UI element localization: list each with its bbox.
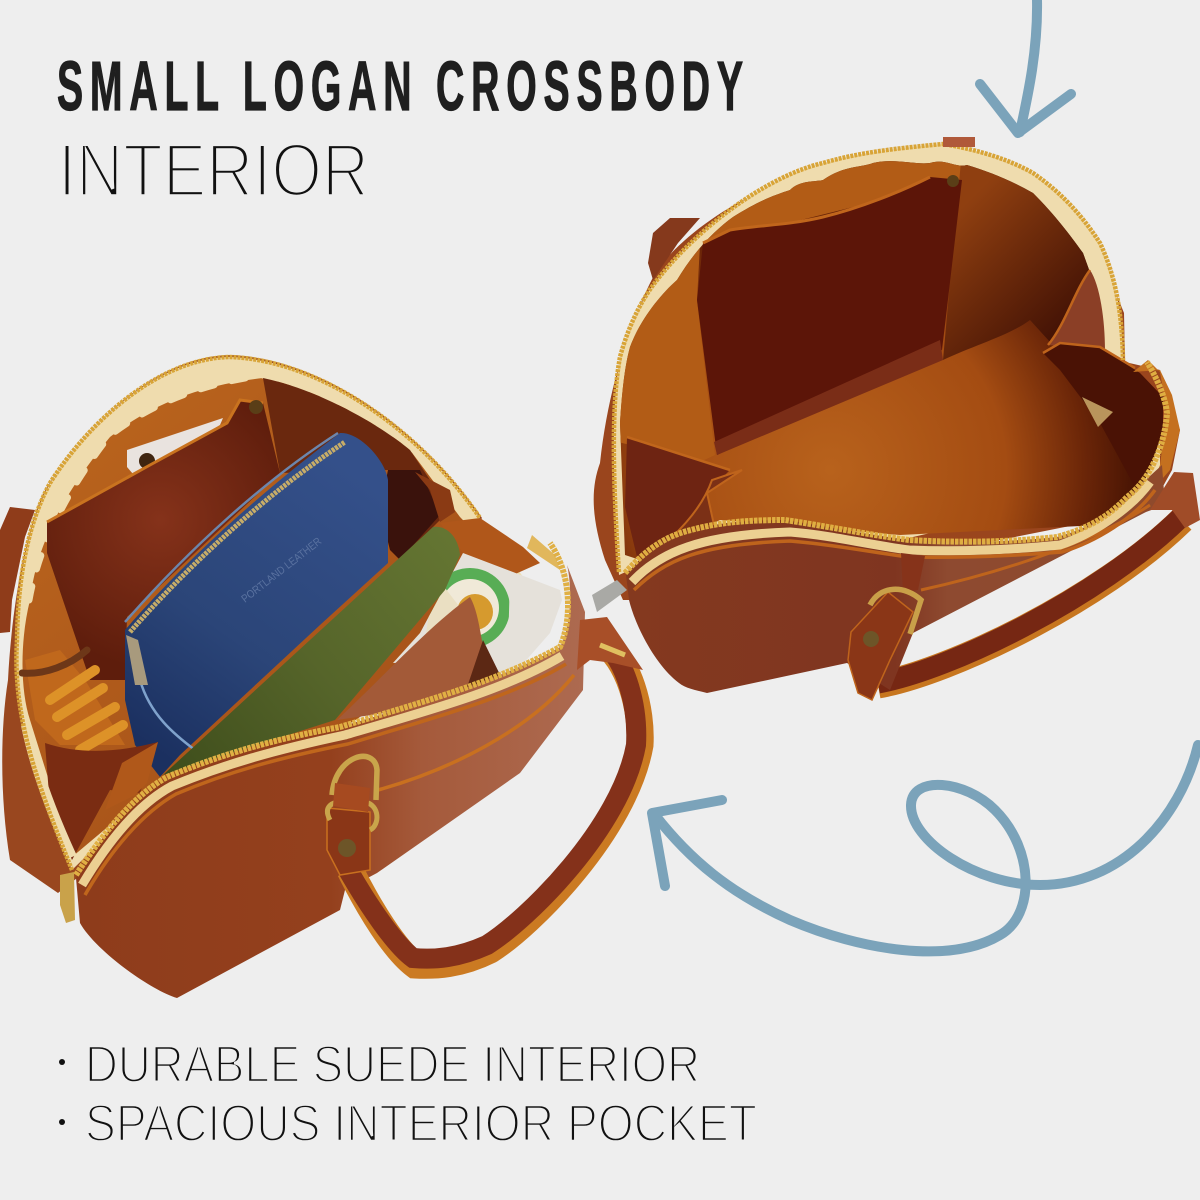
bottles <box>380 470 440 560</box>
fold line <box>378 675 574 790</box>
zipper pull on pouch <box>126 635 148 685</box>
feature list <box>59 1036 757 1153</box>
strap keeper lower <box>848 592 913 700</box>
fold line <box>921 505 1150 590</box>
blue pouch <box>125 433 388 777</box>
green roll <box>163 527 460 775</box>
lower pocket flap <box>105 742 158 810</box>
leather pocket <box>47 400 280 680</box>
bullet 2 <box>59 1119 65 1125</box>
cream tab <box>527 535 560 570</box>
right dark pocket <box>1043 343 1163 487</box>
hardware ring <box>870 589 921 634</box>
strap keeper lower <box>327 808 370 875</box>
pocket lower hem <box>714 340 943 455</box>
suede interior <box>620 161 1160 560</box>
blue pouch zipper <box>130 442 345 632</box>
scalloped lining edge <box>29 375 411 600</box>
cream lining <box>614 144 1160 575</box>
pocket top edge <box>703 177 930 243</box>
rivet <box>863 631 879 647</box>
feature 2: SPACIOUS INTERIOR POCKET <box>85 1095 757 1153</box>
scarf <box>393 553 562 690</box>
small side pocket left <box>625 437 730 557</box>
cream lining <box>16 357 540 870</box>
bullet 1 <box>59 1059 65 1065</box>
back zipper <box>16 357 480 870</box>
hair clip base <box>25 650 125 745</box>
side loop <box>648 218 700 280</box>
front zipper band <box>82 656 562 885</box>
handle <box>348 640 640 965</box>
brass D ring <box>332 756 377 800</box>
back shell <box>2 355 482 893</box>
handle top tab <box>577 617 643 670</box>
interior pocket <box>697 177 962 455</box>
arrow: looping arrow pointing at left bag handle <box>652 745 1198 951</box>
pocket rivet <box>249 400 263 414</box>
right suede flap <box>440 518 540 575</box>
side pocket flap <box>672 470 742 537</box>
strap <box>878 518 1182 685</box>
front zipper <box>625 362 1167 573</box>
strap loop <box>333 783 370 812</box>
top tab <box>943 137 975 147</box>
suede interior <box>22 378 540 857</box>
rivet <box>338 839 356 857</box>
back zipper <box>614 144 1123 572</box>
front flap <box>626 465 1165 693</box>
pocket rivet <box>947 175 959 187</box>
brand text on pouch: PORTLAND LEATHER <box>239 536 324 605</box>
brass lower ring <box>327 802 377 830</box>
hair clip strip <box>22 650 87 673</box>
front zipper band <box>632 482 1150 582</box>
phone <box>127 418 223 474</box>
right bag: open empty bag showing suede interior and pocket <box>592 137 1200 700</box>
back shell <box>594 146 1180 600</box>
side tab <box>0 507 35 633</box>
dark sliver <box>460 640 510 708</box>
upper keeper <box>901 553 925 592</box>
zip pull <box>592 580 627 612</box>
left bag: open bag filled with items <box>0 355 643 998</box>
front zipper <box>76 543 568 875</box>
right wall <box>943 165 1089 360</box>
flap right of interior <box>1048 270 1105 350</box>
tassel <box>140 680 195 750</box>
strap tab right <box>1150 472 1200 528</box>
zip pull <box>60 872 75 923</box>
feature 1: DURABLE SUEDE INTERIOR <box>85 1036 700 1094</box>
handle buckle <box>600 645 625 655</box>
arrow: top right pointing at bag <box>980 0 1071 133</box>
phone camera <box>139 453 155 469</box>
inner flap <box>415 472 455 522</box>
scarf pattern <box>425 568 510 648</box>
hair clip teeth <box>50 670 123 750</box>
scarf sliver <box>1082 397 1113 427</box>
front flap <box>76 565 585 998</box>
tan leather item <box>337 597 497 720</box>
right outer edge <box>1133 360 1180 495</box>
upper suede wall <box>610 150 962 462</box>
upper dark back wall <box>263 378 450 560</box>
subtitle: INTERIOR <box>58 128 369 212</box>
lower side pocket <box>45 742 158 860</box>
title: SMALL LOGAN CROSSBODY <box>57 48 743 126</box>
lower cream band <box>26 725 72 857</box>
